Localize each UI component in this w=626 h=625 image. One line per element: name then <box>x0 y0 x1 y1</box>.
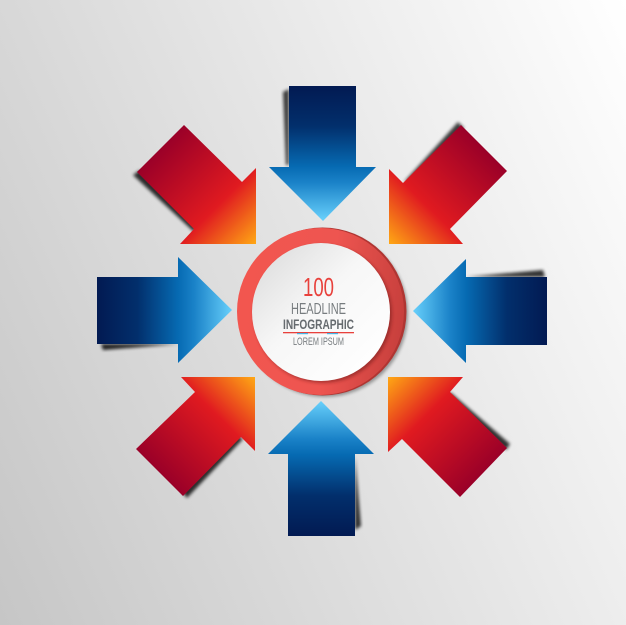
arrow: left blue <box>97 257 232 363</box>
arrow: bottom-right red <box>388 377 510 497</box>
arrow: top blue <box>269 86 376 221</box>
ring shadow <box>242 231 408 397</box>
arrow: top-right red <box>389 122 507 244</box>
arrow: bottom-left red <box>136 377 255 498</box>
arrow: bottom blue <box>268 401 374 536</box>
lorem ipsum text: LOREM IPSUM <box>293 336 344 348</box>
inner disc shadow <box>254 245 392 383</box>
underline <box>283 332 354 334</box>
number 100: 100 <box>303 272 334 302</box>
red ring <box>237 228 404 395</box>
infographic text: INFOGRAPHIC <box>283 316 354 332</box>
headline text: HEADLINE <box>291 301 346 318</box>
inner white disc <box>252 243 390 381</box>
arrow: top-left red <box>133 125 256 244</box>
arrow: right blue <box>413 259 547 363</box>
dark ring rim <box>238 228 406 396</box>
center badge <box>237 228 408 397</box>
